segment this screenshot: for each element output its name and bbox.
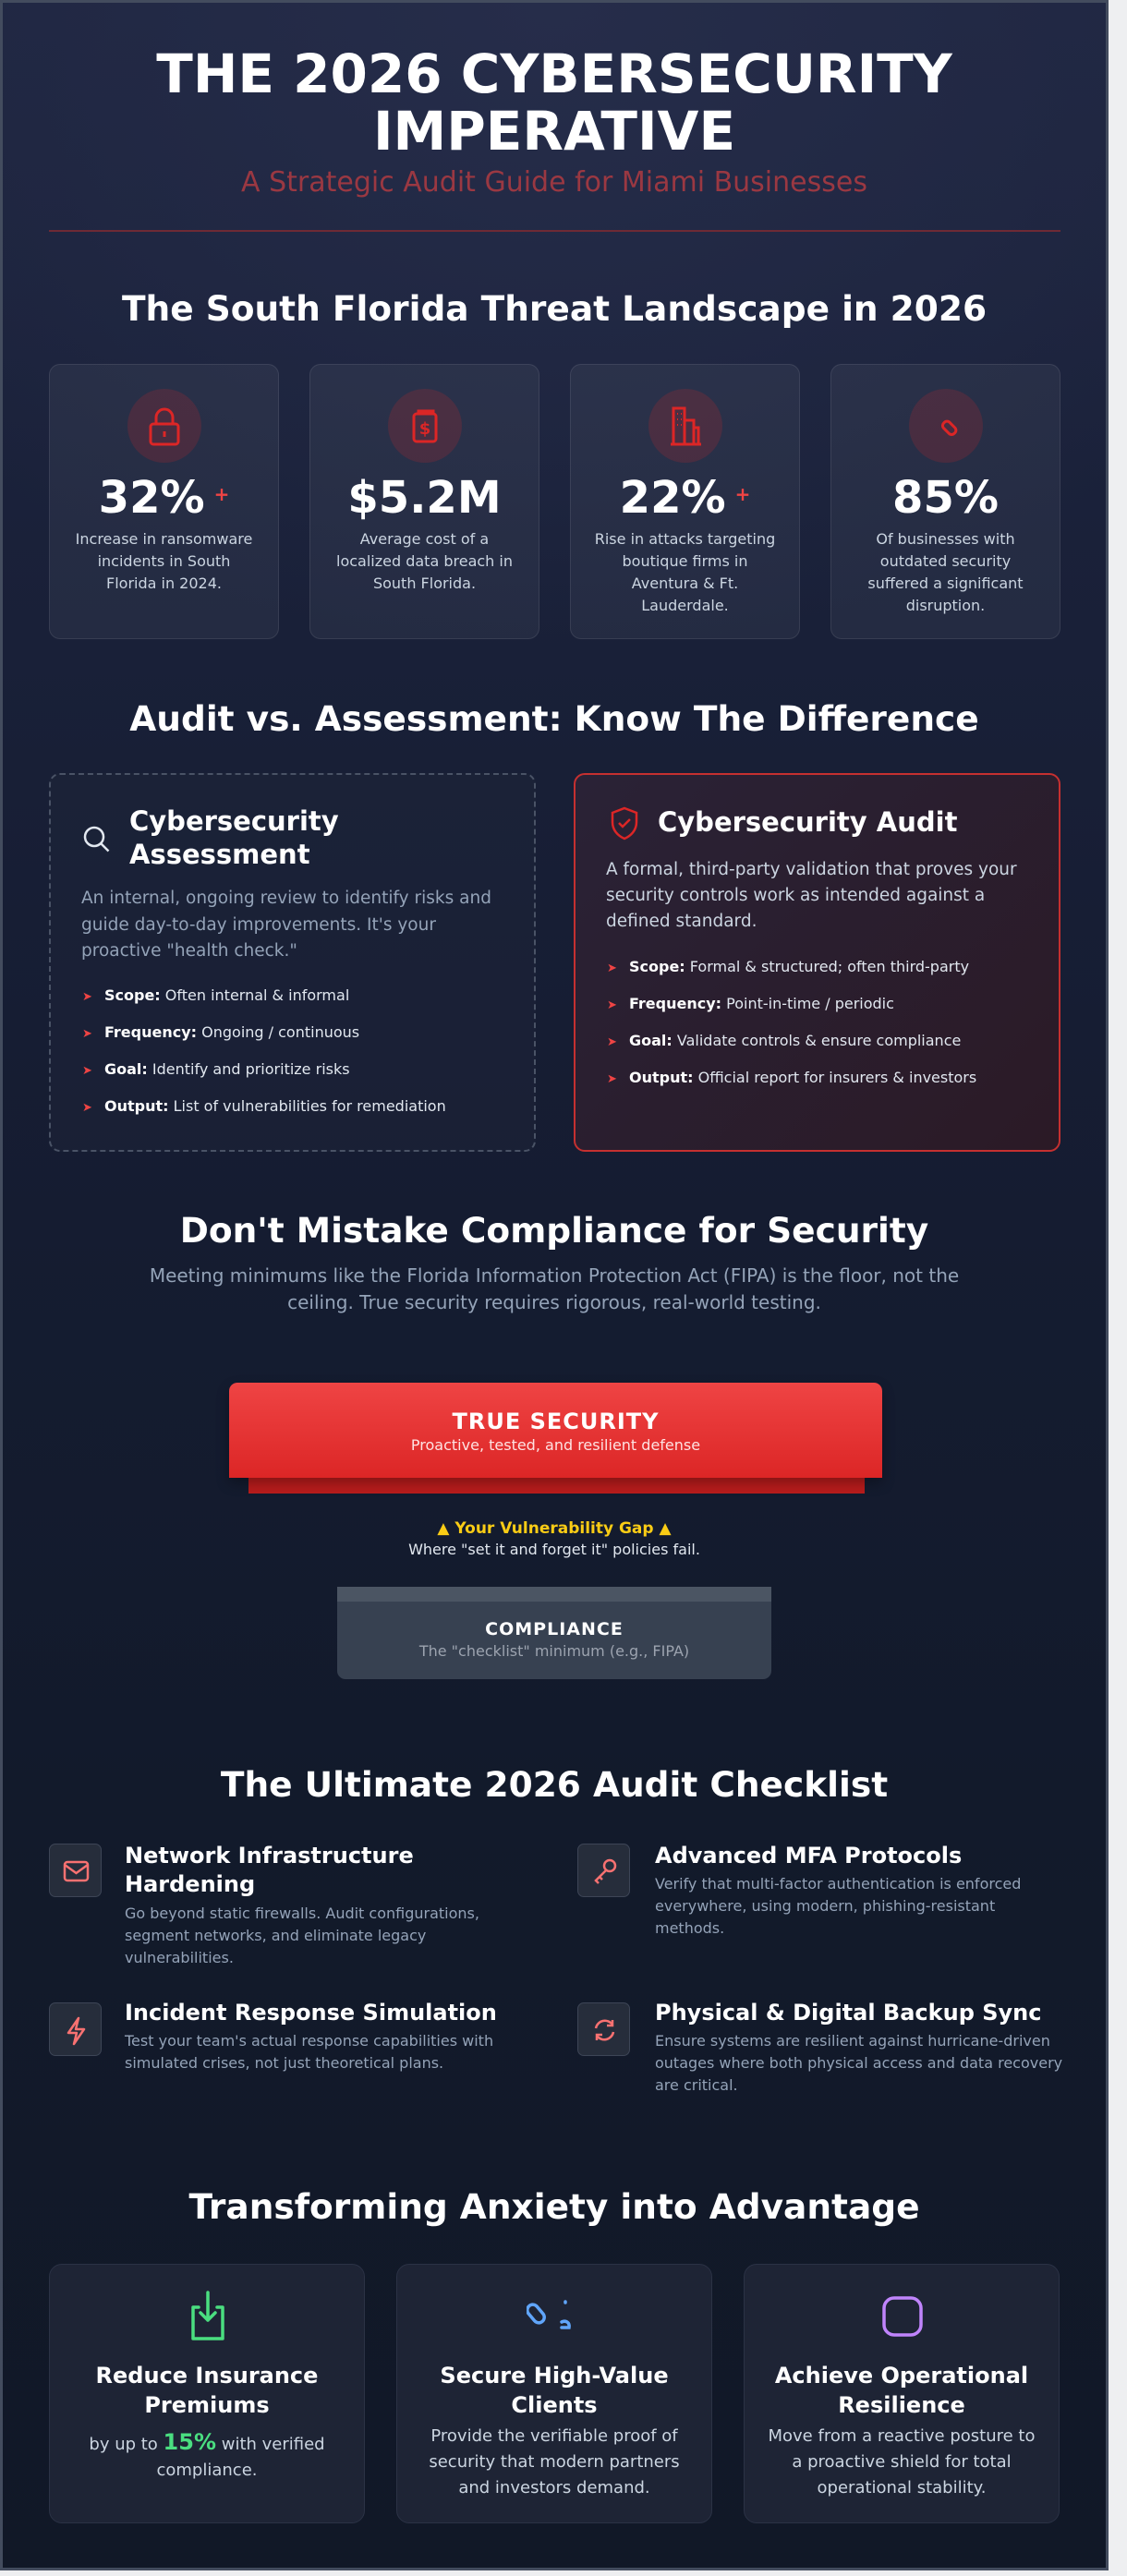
checklist item: network: Go beyond static firewalls. Audit configurations, segment networks, and eliminate legacy vulnerabilities.	[125, 1905, 479, 1966]
icon: buildings	[648, 389, 722, 463]
icon: lightning	[49, 2002, 102, 2056]
stat card 2	[309, 364, 539, 639]
panel: audit: ➤	[607, 1035, 617, 1049]
panel: assessment: ➤	[82, 1027, 92, 1041]
callout: vulnerability gap: Where "set it and forget it" policies fail.	[408, 1541, 700, 1558]
panel: audit: ➤	[607, 1072, 617, 1086]
benefit card: resilience: Achieve Operational	[775, 2363, 1028, 2389]
assessment bullets: Output: List of vulnerabilities for remediation	[104, 1097, 446, 1115]
icon: money: $	[419, 419, 430, 439]
panel: assessment: ➤	[82, 1101, 92, 1115]
checklist item: MFA: Advanced MFA Protocols	[655, 1843, 962, 1869]
benefit card: resilience: Move from a reactive posture to a proactive shield for total operational stability.	[768, 2426, 1036, 2497]
checklist item: backup: Ensure systems are resilient against hurricane-driven outages where both physical access and data recovery are critical.	[655, 2032, 1062, 2094]
checklist item: network: Hardening	[125, 1871, 255, 1897]
stat card 4: suffered a significant	[867, 574, 1024, 592]
checklist item: MFA: Verify that multi-factor authentication is enforced everywhere, using modern, phishing-resistant methods.	[655, 1875, 1021, 1937]
assessment bullets: Scope: Often internal & informal	[104, 986, 349, 1004]
audit bullets: Output: Official report for insurers & investors	[629, 1069, 976, 1086]
heading: compliance: Don't Mistake Compliance for Security	[180, 1210, 928, 1251]
benefit card: insurance	[49, 2264, 365, 2523]
checklist item: incident response	[49, 2000, 497, 2072]
stat card 2: South Florida.	[373, 574, 476, 592]
title: IMPERATIVE	[373, 100, 735, 163]
stat card 2: $5.2M	[347, 472, 502, 524]
stat card 1: 32% +	[99, 472, 229, 524]
stat card 1: incidents in South	[98, 552, 230, 570]
benefit card: clients	[396, 2264, 712, 2523]
benefit card: resilience: Resilience	[838, 2392, 965, 2418]
audit description: A formal, third-party validation that proves your security controls work as intended against a defined standard.	[606, 860, 1017, 931]
checklist item: backup: Physical & Digital Backup Sync	[655, 2000, 1041, 2026]
diagram: true security block: Proactive, tested, and resilient defense	[411, 1436, 700, 1454]
checklist item: incident response: Incident Response Simulation	[125, 2000, 497, 2026]
stat card 3: Lauderdale.	[641, 597, 729, 614]
stat card 4: 85%	[892, 472, 999, 524]
diagram: true security block	[229, 1383, 882, 1494]
checklist item: backup	[577, 2000, 1062, 2094]
stat card 3	[570, 364, 800, 639]
stat card 1: Increase in ransomware	[76, 530, 252, 548]
benefit card: insurance: by up to 15% with verified compliance.	[89, 2429, 325, 2480]
stat card 3: Rise in attacks targeting	[595, 530, 775, 548]
audit title: Cybersecurity Audit	[658, 806, 957, 838]
compliance intro text: Meeting minimums like the Florida Information Protection Act (FIPA) is the floor, not the ceiling. True security requires rigorous, real-world testing.	[150, 1264, 959, 1313]
panel: assessment: ➤	[82, 1064, 92, 1078]
assessment description: An internal, ongoing review to identify risks and guide day-to-day improvements. It's your proactive "health check."	[81, 889, 491, 961]
icon: link	[527, 2300, 571, 2329]
subtitle: A Strategic Audit Guide for Miami Businesses	[241, 166, 867, 199]
icon: envelope	[49, 1844, 102, 1897]
assessment title: Cybersecurity	[129, 805, 339, 837]
benefit card: resilience	[744, 2264, 1060, 2523]
stat card 3: 22% +	[620, 472, 750, 524]
panel: audit: ➤	[607, 998, 617, 1012]
assessment title	[129, 805, 339, 870]
callout: vulnerability gap: ▲ Your Vulnerability Gap ▲	[437, 1519, 672, 1538]
benefit card: insurance: Reduce Insurance	[96, 2363, 318, 2389]
diagram: compliance block	[337, 1587, 771, 1679]
assessment bullets	[82, 986, 446, 1115]
heading: advantage: Transforming Anxiety into Advantage	[188, 2186, 920, 2227]
callout: vulnerability gap	[408, 1519, 700, 1558]
icon: pill	[909, 389, 983, 463]
panel: audit: ➤	[607, 961, 617, 975]
icon: shield	[612, 807, 637, 841]
checklist item: MFA	[577, 1843, 1021, 1937]
icon: download	[191, 2291, 224, 2340]
audit bullets	[607, 958, 976, 1086]
stat card 1	[49, 364, 279, 639]
checklist item: network	[49, 1843, 479, 1966]
stat card 2: localized data breach in	[336, 552, 513, 570]
checklist item: incident response: Test your team's actual response capabilities with simulated crises, not just theoretical plans.	[125, 2032, 493, 2072]
panel: audit	[574, 773, 1060, 1152]
benefit card: clients: Clients	[511, 2392, 598, 2418]
title	[156, 42, 953, 163]
audit bullets: Scope: Formal & structured; often third-party	[629, 958, 969, 975]
benefit card: clients: Provide the verifiable proof of security that modern partners and investors demand.	[429, 2426, 680, 2497]
icon: lock	[127, 389, 201, 463]
audit bullets: Goal: Validate controls & ensure compliance	[629, 1032, 961, 1049]
stat card 2: Average cost of a	[360, 530, 489, 548]
icon: search	[83, 826, 109, 852]
stat card 3: boutique firms in	[623, 552, 748, 570]
assessment title: Assessment	[129, 839, 310, 870]
title: THE 2026 CYBERSECURITY	[156, 42, 952, 105]
benefit card: insurance: Premiums	[144, 2392, 270, 2418]
icon: key	[577, 1844, 630, 1897]
assessment bullets: Frequency: Ongoing / continuous	[104, 1023, 359, 1041]
audit bullets: Frequency: Point-in-time / periodic	[629, 995, 894, 1012]
diagram: compliance block: COMPLIANCE	[485, 1619, 624, 1639]
diagram: compliance block: The "checklist" minimum (e.g., FIPA)	[419, 1642, 689, 1660]
panel: assessment: ➤	[82, 990, 92, 1004]
heading: threat landscape: The South Florida Threat Landscape in 2026	[122, 288, 987, 329]
stat card 4	[830, 364, 1060, 639]
stat card 4: outdated security	[880, 552, 1011, 570]
diagram: true security block: TRUE SECURITY	[452, 1409, 660, 1434]
checklist item: network: Network Infrastructure	[125, 1843, 414, 1869]
stat card 1: Florida in 2024.	[106, 574, 222, 592]
panel: assessment	[49, 773, 536, 1152]
icon: money	[388, 389, 462, 463]
benefit card: clients: Secure High-Value	[440, 2363, 669, 2389]
heading: checklist: The Ultimate 2026 Audit Checklist	[221, 1764, 888, 1805]
stat card 4: Of businesses with	[876, 530, 1015, 548]
assessment bullets: Goal: Identify and prioritize risks	[104, 1060, 350, 1078]
icon: sync	[577, 2002, 630, 2056]
stat card 3: Aventura & Ft.	[632, 574, 738, 592]
icon: rounded square	[882, 2296, 923, 2337]
heading: audit vs assessment: Audit vs. Assessment: Know The Difference	[129, 698, 979, 739]
stat card 4: disruption.	[906, 597, 985, 614]
